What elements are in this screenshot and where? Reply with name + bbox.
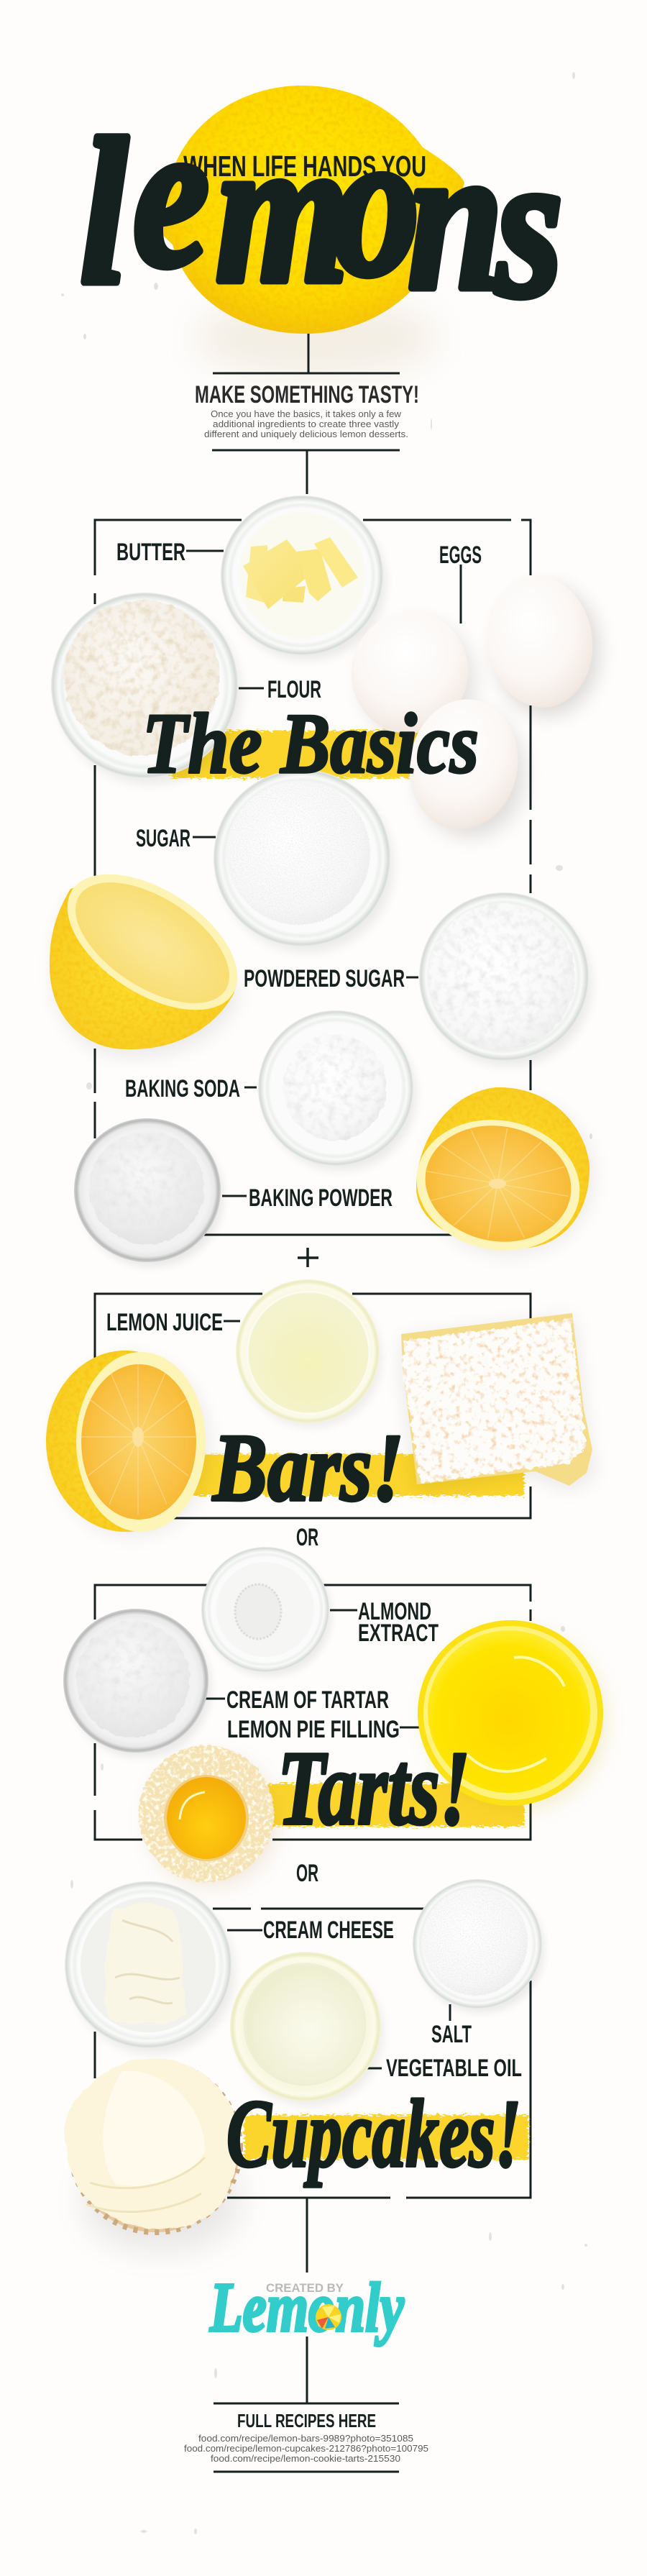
bowl: cream of tartar — [63, 1609, 211, 1758]
eggs — [339, 569, 601, 839]
ingredient labels: BAKING SODA — [125, 1075, 240, 1102]
ingredient labels: LEMON JUICE — [106, 1309, 223, 1336]
bowl: vegetable oil — [230, 1952, 384, 2106]
connector to recipes — [214, 2337, 399, 2403]
bowl: lemon pie filling — [418, 1620, 607, 1811]
title: Cupcakes: Cupcakes! — [226, 2081, 521, 2188]
lemon bar — [401, 1313, 597, 1492]
label: or: OR — [296, 1524, 318, 1551]
stripe: the basics — [171, 731, 423, 778]
intro paragraph — [204, 409, 408, 439]
half lemon: left — [46, 1351, 210, 1536]
recipe links: food.com/recipe/lemon-bars-9989?photo=351085 — [198, 2433, 413, 2444]
connector line: lemon juice — [224, 1320, 240, 1322]
subheading: make something tasty: MAKE SOMETHING TASTY! — [195, 381, 419, 408]
recipe links — [184, 2433, 428, 2464]
logo: created by lemonly: Lemonly — [209, 2269, 404, 2347]
bowl: almond extract — [201, 1547, 332, 1676]
connector lines: basics — [186, 551, 461, 1196]
intro paragraph: different and uniquely delicious lemon desserts. — [204, 429, 408, 439]
logo: created by lemonly: CREATED BY — [266, 2281, 344, 2295]
ingredient labels: CREAM CHEESE — [263, 1917, 394, 1944]
stripe: cupcakes — [244, 2115, 528, 2160]
ingredient labels: EXTRACT — [358, 1620, 439, 1647]
stem line and top rule — [213, 334, 400, 373]
half lemon: right — [406, 1087, 594, 1263]
intro paragraph: additional ingredients to create three vastly — [213, 419, 400, 429]
recipe links: food.com/recipe/lemon-cookie-tarts-215530 — [211, 2453, 400, 2464]
ingredient labels: CREAM OF TARTAR — [226, 1686, 389, 1714]
ingredient labels: LEMON PIE FILLING — [227, 1716, 400, 1743]
cupcake — [65, 2058, 241, 2251]
bowl: baking soda — [258, 1010, 416, 1171]
bowl: baking powder — [74, 1118, 224, 1267]
bowl: salt — [413, 1879, 545, 2013]
tart cookie — [139, 1745, 278, 1887]
label: or: OR — [296, 1860, 318, 1887]
ingredient labels — [106, 539, 522, 2082]
big lemon — [161, 86, 464, 378]
bowl: powdered sugar — [419, 892, 592, 1067]
title: Bars: Bars! — [211, 1415, 404, 1522]
frame: tarts — [95, 1585, 531, 1840]
stripe: bars — [190, 1454, 524, 1496]
bowl: butter — [221, 495, 387, 661]
frame: bars — [95, 1294, 531, 1518]
connector lines: cupcakes — [227, 1930, 450, 2068]
lower rule and connector — [212, 450, 400, 494]
frame: cupcakes — [95, 1909, 531, 2198]
stripe: tarts — [268, 1783, 524, 1827]
ingredient labels: VEGETABLE OIL — [386, 2055, 522, 2082]
bowl: cream cheese — [65, 1881, 235, 2054]
title: Lemons: lemons — [81, 80, 563, 340]
bowl: lemon juice — [236, 1279, 382, 1428]
plus sign — [298, 1248, 318, 1267]
heading: full recipes here: FULL RECIPES HERE — [237, 2410, 376, 2431]
ingredient labels: BUTTER — [116, 539, 185, 566]
connector to logo — [306, 2198, 308, 2273]
intro paragraph: Once you have the basics, it takes only a few — [211, 409, 402, 419]
the basics title: The Basics — [142, 695, 479, 791]
title: Tarts: Tarts! — [277, 1730, 470, 1847]
frame: the basics — [95, 520, 531, 1235]
bowl: flour — [51, 593, 242, 785]
ingredient labels: POWDERED SUGAR — [244, 965, 405, 992]
ingredient labels: ALMOND — [358, 1598, 431, 1625]
half lemon: upper left — [44, 846, 261, 1056]
heading: when life hands you: WHEN LIFE HANDS YOU — [183, 150, 426, 183]
ingredient labels: SALT — [431, 2021, 472, 2048]
ingredient labels: BAKING POWDER — [249, 1184, 393, 1212]
bowl: sugar — [214, 769, 394, 953]
ingredient labels: EGGS — [439, 542, 482, 569]
ingredient labels: SUGAR — [136, 825, 191, 852]
ingredient labels: FLOUR — [267, 676, 321, 703]
recipe links: food.com/recipe/lemon-cupcakes-212786?photo=100795 — [184, 2443, 428, 2454]
connector lines: tarts — [206, 1610, 419, 1727]
bottom rule — [214, 2471, 399, 2472]
